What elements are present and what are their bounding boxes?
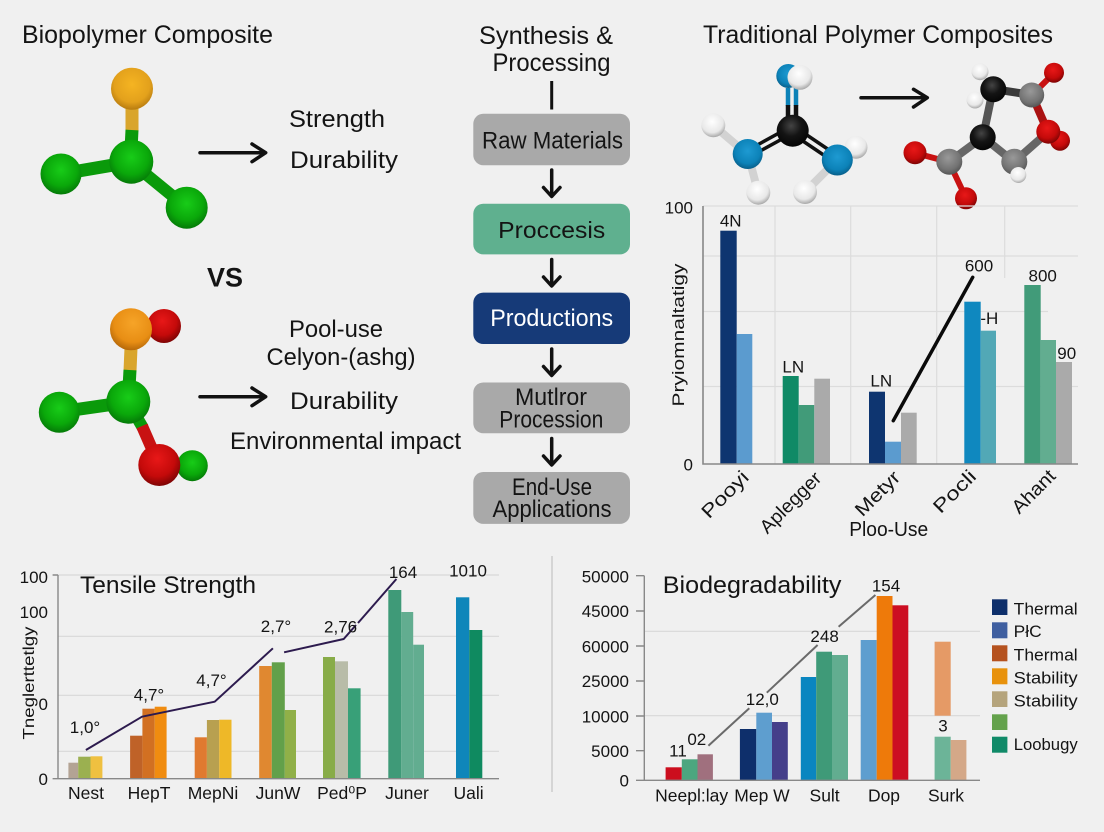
icon: biopolymer molecule	[40, 68, 208, 229]
text: tensile x axis: MepNi	[188, 783, 238, 803]
icon: traditional polymer molecule	[904, 63, 1070, 209]
text: biodegradability x axis: Neepl:lay	[655, 786, 728, 806]
text: biodegradability y axis	[582, 568, 629, 790]
text: tensile y axis: 100	[20, 603, 48, 622]
text: strength properties: Strength	[289, 106, 385, 133]
chart: end-use bar chart: 0	[684, 456, 693, 474]
chart: end-use bar chart: LN	[782, 358, 804, 376]
text: tensile data labels: 2,76	[324, 618, 357, 636]
chart: end-use bar chart: 600	[965, 256, 993, 276]
line: tensile trend	[86, 579, 396, 750]
text: tensile y axis: Tneglerttetlgy	[21, 626, 38, 740]
panel: tensile strength chart	[20, 562, 499, 803]
text: biodegradability y axis: 0	[620, 772, 629, 790]
arrow: productions to procession	[544, 349, 560, 376]
text: biodegradability y axis: 45000	[582, 602, 629, 621]
box: end-use applications: Applications	[492, 496, 612, 523]
text: tensile data labels: 1010	[449, 562, 487, 580]
text: biodegradability y axis: 25000	[582, 672, 629, 691]
text: tensile data labels: 2,7°	[261, 617, 291, 636]
text: tensile data labels: 1,0°	[70, 718, 100, 737]
box: end-use applications	[473, 472, 630, 524]
text: biodegradability y axis: 50000	[582, 568, 629, 586]
panel: biopolymer composite	[22, 21, 461, 486]
box: productions	[473, 293, 630, 344]
box: process: Proccesis	[498, 217, 605, 243]
panel: traditional polymer composites	[665, 21, 1078, 541]
bars: tensile strength values	[68, 590, 482, 779]
text: biodegradability x axis: Dop	[868, 786, 900, 806]
text: biodegradability x axis	[655, 786, 964, 806]
text: biodegradability y axis: 10000	[582, 708, 629, 726]
text: tensile data labels	[70, 562, 487, 737]
text: biodegradability data labels: 154	[872, 576, 900, 596]
text: tensile x axis: Ped⁰P	[317, 783, 367, 803]
box: raw materials	[473, 114, 630, 165]
text: biodegradability data labels: 248	[810, 627, 839, 646]
chart: end-use bar chart: Ahant	[1008, 465, 1061, 518]
box: end-use applications: End-Use	[512, 474, 592, 501]
text: biodegradability data labels: 3	[938, 716, 948, 736]
text: tensile x axis: Uali	[454, 783, 484, 803]
heading: biopolymer composite: Biopolymer Composite	[22, 21, 273, 49]
connector line	[550, 81, 553, 110]
text: tensile x axis: Nest	[68, 783, 104, 803]
chart: end-use bar chart	[665, 198, 1078, 541]
line: biodegradability trend	[708, 595, 875, 746]
chart: end-use bar chart: 4N	[720, 212, 742, 230]
chart: end-use bar chart: -H	[980, 309, 998, 328]
text: biodegradability x axis: Surk	[928, 786, 964, 806]
chart: end-use bar chart: Pryiomnaltatigy	[669, 263, 688, 406]
chart: end-use bar chart: Metyr	[851, 467, 906, 521]
text: tensile y axis	[20, 568, 48, 789]
text: modified properties: Environmental impact	[230, 428, 461, 455]
legend: Thermal	[1014, 646, 1078, 665]
legend: Loobugy	[1014, 735, 1078, 754]
arrow: monomer to polymer	[861, 89, 927, 107]
text: tensile x axis: Juner	[385, 783, 429, 803]
text: modified properties: Durability	[290, 388, 398, 415]
text: biodegradability data labels: 02	[687, 730, 706, 749]
chart: end-use bar chart: Pocli	[929, 466, 981, 518]
text: tensile data labels: 4,7°	[134, 686, 164, 704]
text: biodegradability y axis: 5000	[591, 742, 629, 761]
box: process	[473, 204, 630, 254]
box: raw materials: Raw Materials	[482, 128, 623, 154]
chart: end-use bar chart: 800	[1029, 266, 1057, 286]
text: tensile y axis: 0	[39, 695, 48, 714]
chart: end-use bar chart: LN	[870, 372, 892, 390]
icon: modified molecule	[39, 308, 208, 486]
box: procession: Procession	[499, 406, 603, 434]
text: modified properties	[230, 316, 461, 455]
text: biodegradability x axis: Sult	[810, 786, 840, 806]
text: strength properties: Durability	[290, 147, 398, 174]
chart: end-use bar chart: Ploo-Use	[849, 519, 928, 541]
arrow: process to productions	[544, 260, 560, 286]
arrow: modified molecule to properties	[200, 388, 266, 406]
text: tensile x axis: JunW	[256, 783, 301, 803]
arrow: molecule to strength properties	[200, 144, 266, 162]
heading: traditional polymer composites: Traditional Polymer Composites	[703, 21, 1053, 49]
text: biodegradability y axis: 60000	[582, 638, 629, 656]
arrow: raw materials to process	[544, 170, 560, 196]
box: procession	[473, 382, 630, 434]
chart: end-use bar chart: 100	[665, 198, 693, 218]
heading: synthesis and processing	[479, 22, 613, 77]
text: biodegradability x axis: Mep W	[734, 786, 790, 806]
text: biodegradability data labels: 11	[669, 742, 687, 760]
text: modified properties: Celyon-(ashg)	[266, 344, 416, 371]
chart: end-use bar chart: Pooyi	[698, 467, 754, 523]
icon: traditional monomer molecule	[701, 64, 868, 205]
text: strength properties	[289, 106, 398, 174]
heading: synthesis and processing: Processing	[492, 49, 610, 77]
chart: end-use bar chart: Aplegger	[756, 468, 827, 538]
text: tensile x axis: HepT	[128, 783, 171, 803]
text: tensile y axis: 0	[39, 770, 48, 789]
heading: biodegradability: Biodegradability	[663, 572, 841, 599]
label: VS: VS	[207, 262, 243, 292]
text: tensile data labels: 164	[389, 563, 417, 582]
chart: end-use bar chart: 90	[1057, 344, 1076, 363]
text: tensile x axis	[68, 783, 484, 803]
legend: Stability	[1014, 669, 1078, 688]
text: tensile y axis: 100	[20, 568, 48, 587]
heading: synthesis and processing: Synthesis &	[479, 22, 613, 50]
box: procession: Mutlror	[515, 384, 587, 411]
text: modified properties: Pool-use	[289, 316, 383, 343]
panel: biodegradability chart	[582, 568, 1078, 806]
legend: Thermal	[1014, 599, 1078, 618]
legend	[992, 599, 1078, 754]
arrow: procession to end-use	[544, 438, 560, 465]
legend: PłC	[1014, 622, 1042, 641]
text: tensile data labels: 4,7°	[196, 671, 227, 690]
bars: biodegradability values	[666, 596, 966, 780]
divider	[551, 556, 553, 792]
box: productions: Productions	[490, 305, 613, 332]
text: biodegradability data labels	[669, 576, 948, 760]
text: biodegradability data labels: 12,0	[746, 690, 779, 709]
panel: synthesis and processing flow	[473, 22, 630, 524]
heading: tensile strength: Tensile Strength	[80, 572, 256, 599]
legend: Stability	[1014, 692, 1078, 711]
